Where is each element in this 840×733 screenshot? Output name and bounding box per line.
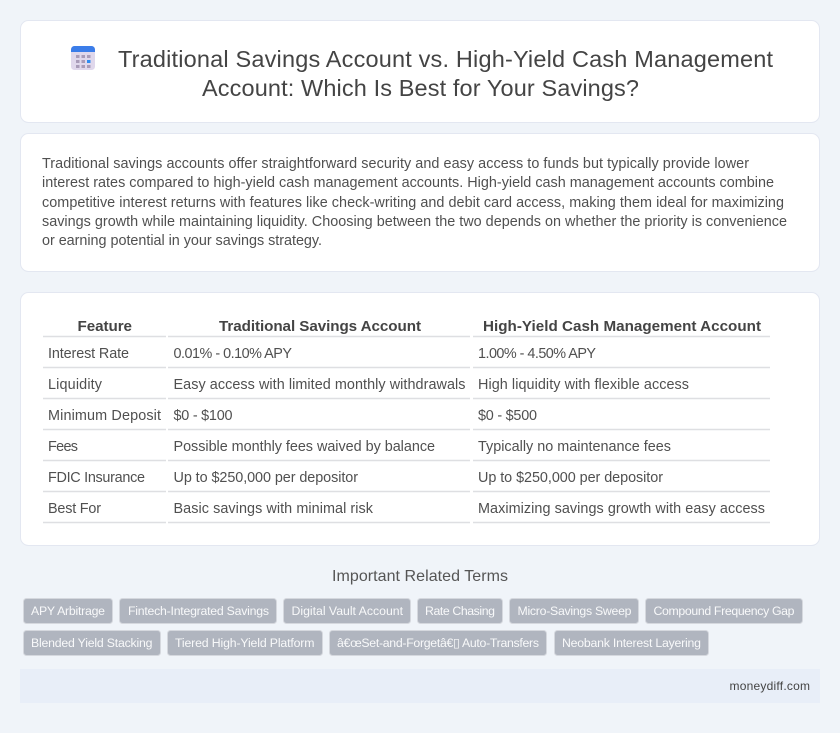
row: FDIC insurance: Up to $250,000 per depositor (174, 470, 358, 486)
row: FDIC insurance (43, 470, 770, 492)
row: minimum deposit: Minimum Deposit (48, 408, 161, 424)
summary text: or earning potential in your savings strategy. (42, 233, 322, 249)
tag: Blended Yield Stacking (31, 636, 153, 650)
summary text: competitive interest returns with features like check-writing and debit card access, making them ideal for maximizing (42, 195, 784, 211)
panel: title header (20, 20, 820, 122)
row: best for: Basic savings with minimal risk (174, 501, 374, 517)
title: Account: Which Is Best for Your Savings? (202, 75, 639, 101)
footer bar (20, 669, 820, 703)
summary text: interest rates compared to high-yield cash management accounts. High-yield cash management accounts combine (42, 175, 774, 191)
tag: Fintech-Integrated Savings (128, 604, 269, 618)
row: FDIC insurance: Up to $250,000 per depositor (478, 470, 663, 486)
row: liquidity: High liquidity with flexible access (478, 377, 689, 393)
footer brand: moneydiff.com (730, 679, 810, 693)
tag (510, 598, 638, 624)
row: minimum deposit: $0 - $500 (478, 408, 537, 424)
tag: Tiered High-Yield Platform (175, 636, 314, 650)
tag: â€œSet-and-Forgetâ€▯ Auto-Transfers (337, 636, 539, 650)
summary text: savings growth while maintaining liquidity. Choosing between the two depends on whether the priority is convenience (42, 214, 787, 230)
tag (554, 630, 708, 656)
row: interest rate: 0.01% - 0.10% APY (174, 346, 292, 362)
row: fees: Fees (48, 439, 78, 455)
row: fees: Possible monthly fees waived by balance (174, 439, 435, 455)
row: best for: Maximizing savings growth with easy access (478, 501, 765, 517)
tag (168, 630, 322, 656)
tag (646, 598, 802, 624)
table header: High-Yield Cash Management Account (483, 318, 761, 335)
table header (43, 318, 770, 336)
heading: important related terms: Important Related Terms (332, 568, 508, 585)
tag: Compound Frequency Gap (654, 604, 795, 618)
row: interest rate (43, 346, 770, 368)
row: fees (43, 439, 770, 460)
tag: APY Arbitrage (31, 604, 105, 618)
row: FDIC insurance: FDIC Insurance (48, 470, 145, 486)
tag (24, 630, 160, 656)
row: liquidity (43, 377, 770, 398)
tag (284, 598, 410, 624)
title (118, 46, 773, 101)
row: interest rate: Interest Rate (48, 346, 129, 362)
tag: Rate Chasing (425, 604, 495, 618)
tag (120, 598, 276, 624)
tag (330, 630, 546, 656)
row: best for: Best For (48, 501, 101, 517)
tag: Micro-Savings Sweep (518, 604, 632, 618)
tag: Neobank Interest Layering (562, 636, 701, 650)
panel: summary paragraph (20, 134, 820, 272)
row: liquidity: Liquidity (48, 377, 103, 393)
title: Traditional Savings Account vs. High-Yield Cash Management (118, 46, 773, 72)
panel: comparison table (20, 292, 820, 546)
row: liquidity: Easy access with limited monthly withdrawals (174, 377, 466, 393)
row: minimum deposit (43, 408, 770, 430)
row: fees: Typically no maintenance fees (478, 439, 671, 455)
row: interest rate: 1.00% - 4.50% APY (478, 346, 596, 362)
summary text: Traditional savings accounts offer straightforward security and easy access to funds but typically provide lower (42, 156, 749, 172)
tag list (24, 598, 802, 656)
tag (418, 598, 502, 624)
icon: calendar (71, 46, 95, 70)
summary text (42, 156, 787, 249)
row: minimum deposit: $0 - $100 (174, 408, 232, 424)
table header: Traditional Savings Account (219, 318, 421, 335)
table header: Feature (78, 318, 132, 335)
row: best for (43, 501, 770, 522)
tag: Digital Vault Account (292, 604, 404, 618)
tag (24, 598, 112, 624)
